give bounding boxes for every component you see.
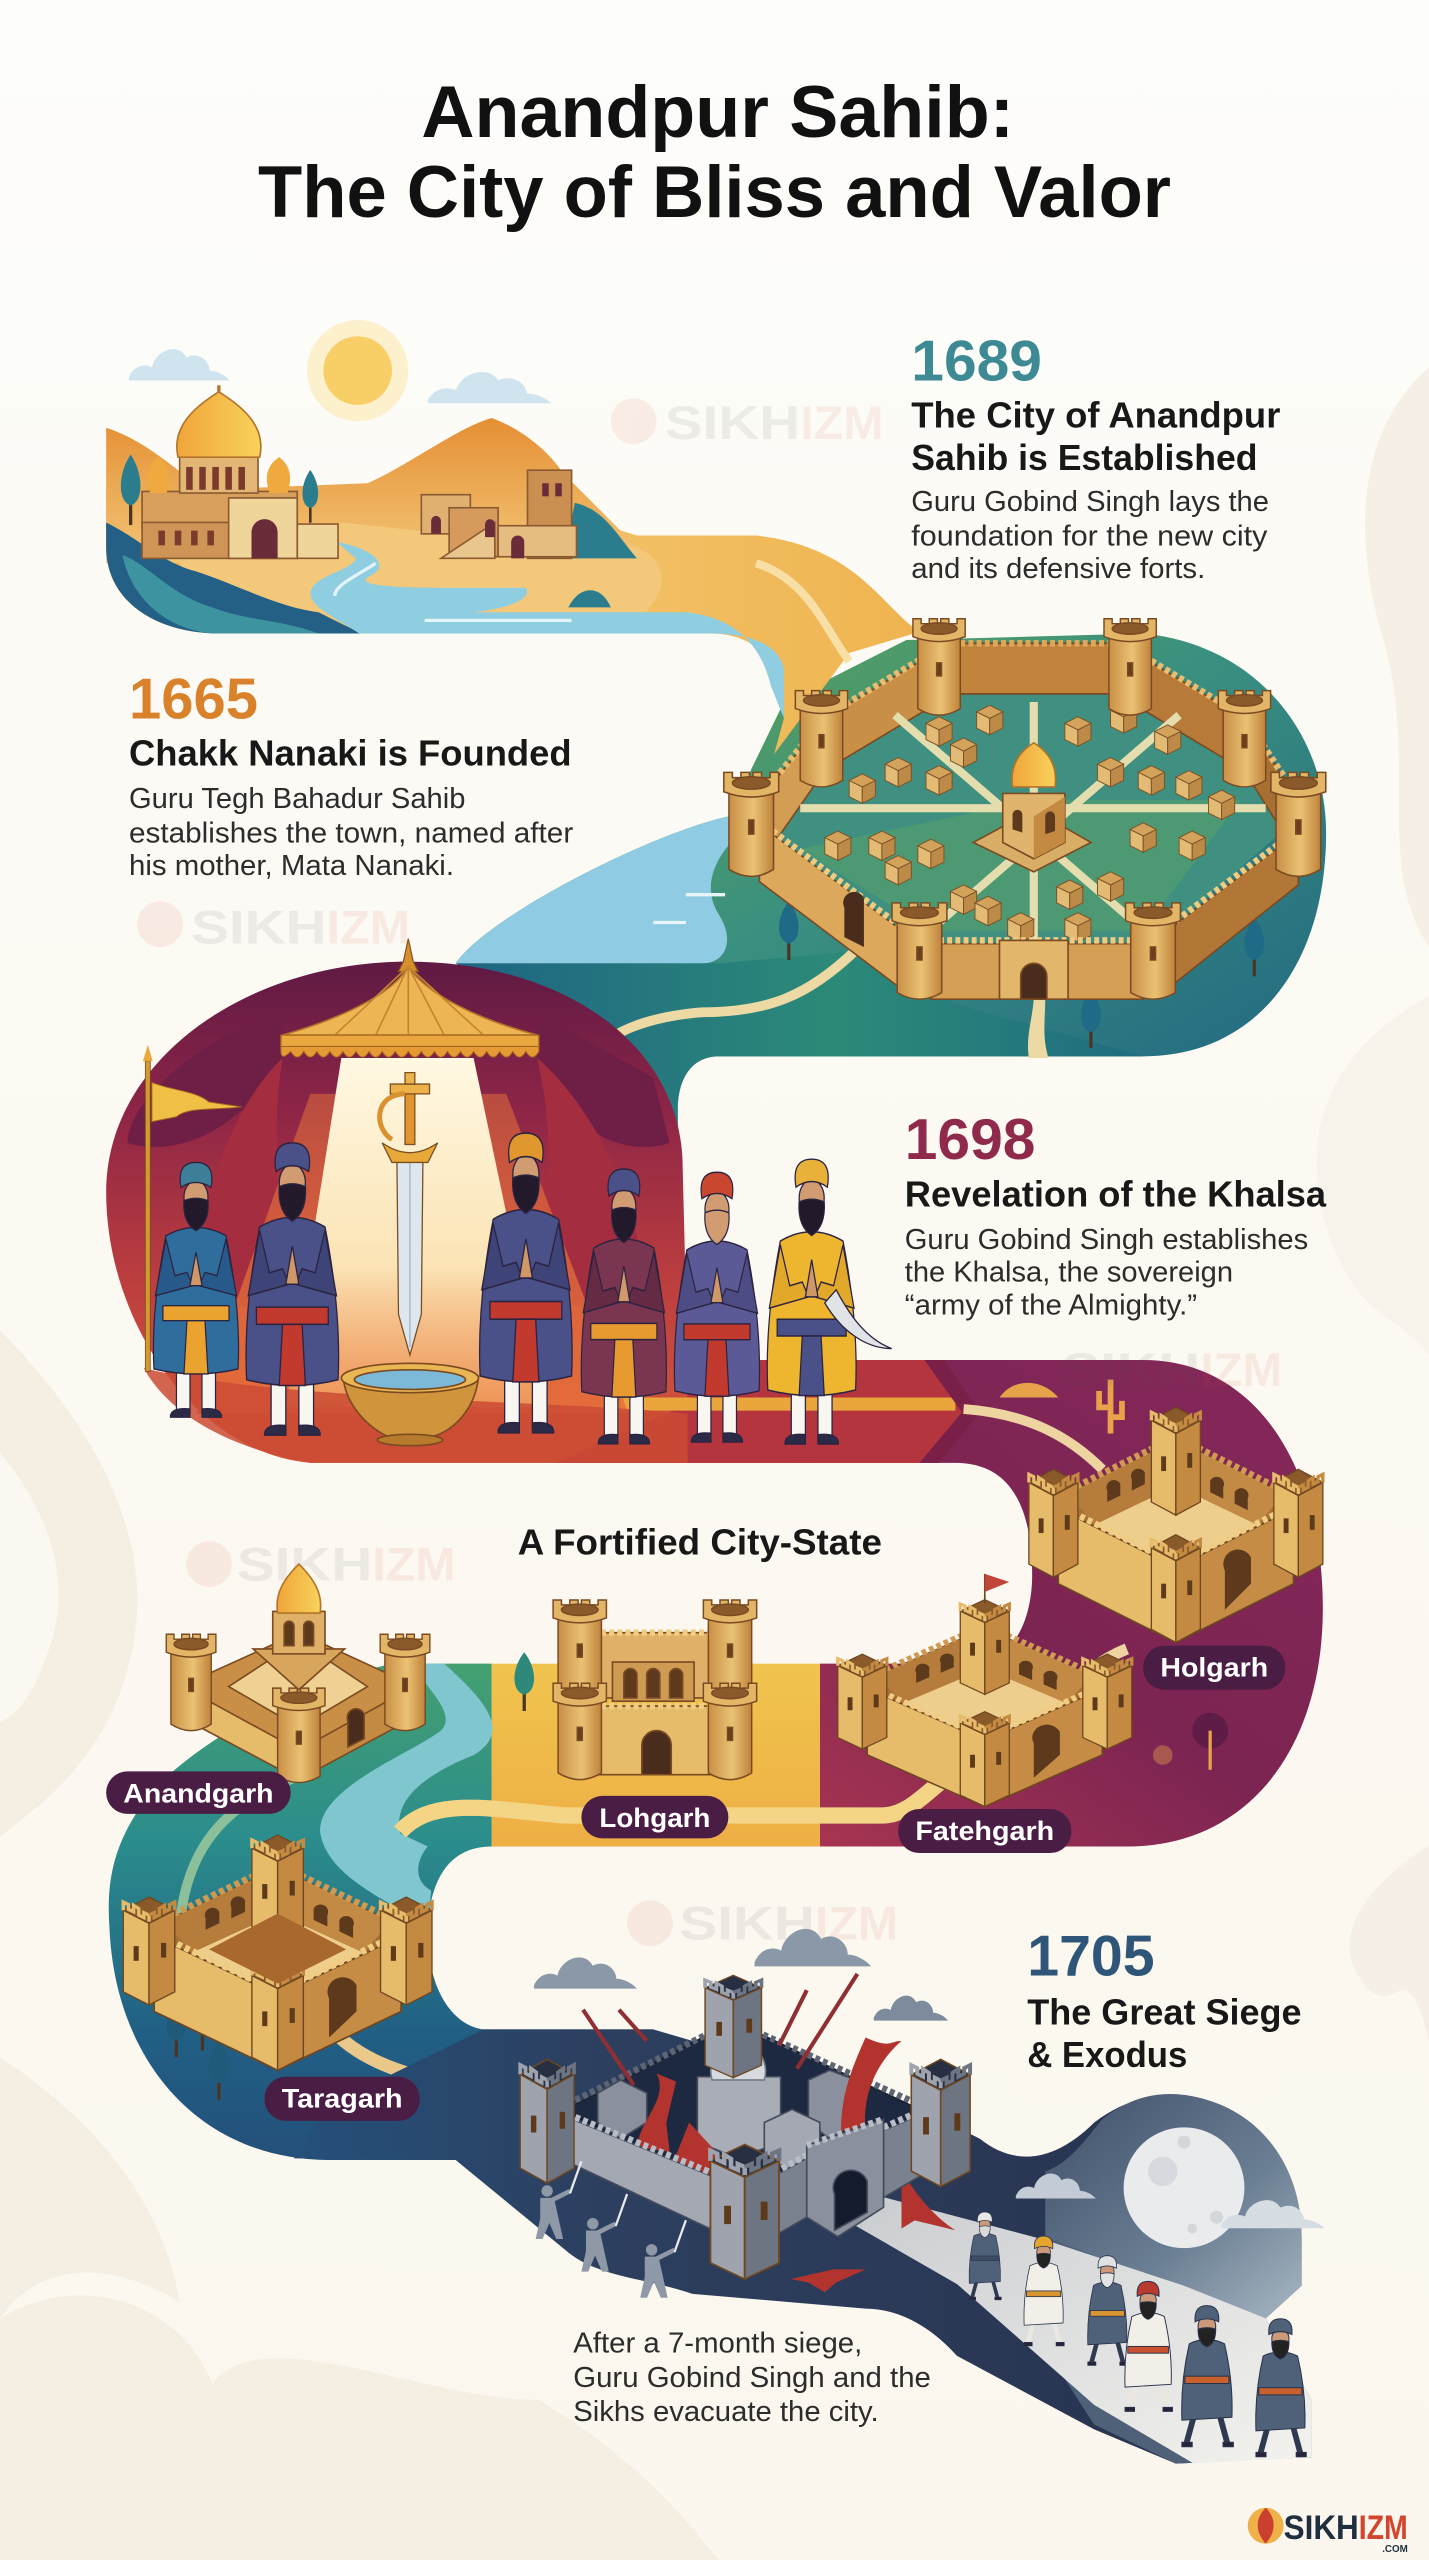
text block: 1689: 1689 [911,329,1042,393]
teal section [109,1664,653,2160]
trees [167,1652,1228,2100]
text block: 1689: and its defensive forts. [911,553,1205,585]
pill label: Lohgarh: Lohgarh [599,1803,710,1833]
text block: 1665: 1665 [129,667,258,731]
panel: Khalsa tent scene [106,939,1323,1847]
watermarks: SIKH [679,1898,815,1951]
mountains [106,418,637,563]
towers [724,619,1326,999]
tent blob [106,962,962,1463]
text block: 1705 description: After a 7-month siege, [573,2328,862,2360]
watermark over ribbon: IZM [1200,1344,1282,1397]
text block: 1705 description: Guru Gobind Singh and the [573,2362,931,2394]
text block: 1665: Chakk Nanaki is Founded [129,733,572,774]
text block: 1689: Sahib is Established [911,437,1258,478]
road [838,2196,1311,2464]
pill label: Fatehgarh [898,1809,1071,1853]
river [310,542,784,718]
title: Anandpur Sahib: [421,70,1014,153]
logo: Sikhizm [1248,2508,1408,2555]
dark ribbon [294,2029,1311,2464]
watermarks: IZM [815,1898,898,1951]
foliage right [563,503,637,558]
fort: Anandgarh [166,1564,430,1783]
watermarks: SIKH [665,397,800,450]
text block: 1705 heading: 1705 [1027,1925,1155,1989]
sword [380,1073,438,1355]
flames and red cloth [637,2073,676,2152]
panel: lower ribbon forts band [109,1407,1323,2160]
pill label: Holgarh: Holgarh [1160,1653,1268,1683]
back walls [939,643,1130,694]
pill label: Taragarh: Taragarh [282,2084,403,2114]
attacking soldiers [536,2161,686,2298]
lower ribbon [964,2237,1311,2464]
text block: 1705 heading: The Great Siege [1027,1991,1302,2032]
pill label: Anandgarh [106,1771,291,1814]
text block: 1698: the Khalsa, the sovereign [905,1257,1233,1289]
roads [800,702,1266,944]
text block: 1705 description [573,2328,931,2428]
floor [144,1368,688,1463]
watermarks: IZM [327,902,410,955]
watermarks: IZM [372,1538,456,1591]
sand ribbon [106,428,919,754]
mosque [697,2077,781,2158]
text block: 1689 [911,329,1280,585]
fort: Lohgarh [553,1600,757,1780]
courtyard [768,694,1290,944]
watermarks: IZM [800,397,884,450]
watermarks [137,397,898,1951]
ruined castle [520,1974,970,2292]
text block: 1665: establishes the town, named after [129,817,574,849]
title: The City of Bliss and Valor [258,150,1171,233]
cream path into forts [964,1409,1102,1469]
towers [520,1975,970,2279]
title [258,70,1171,233]
foliage left [106,522,363,633]
pill label: Lohgarh [581,1796,728,1838]
houses [825,704,1235,942]
logo: Sikhizm: .COM [1382,2544,1408,2555]
evacuating Sikhs [969,2212,1306,2457]
text block: 1698: Guru Gobind Singh establishes [905,1224,1308,1256]
canopy [281,939,539,1057]
pill label: Holgarh [1143,1646,1285,1690]
pill label: Fatehgarh: Fatehgarh [915,1816,1054,1846]
heading: A Fortified City-State: A Fortified City-State [518,1521,882,1562]
orange glow [196,1094,629,1414]
night clouds [534,1929,1324,2228]
logo: Sikhizm: IZM [1359,2509,1408,2547]
five figures and flag bearer [153,1133,892,1444]
outer walls [560,2114,720,2233]
river [320,1664,492,1927]
fort: Fatehgarh [838,1574,1132,1806]
front walls [759,824,906,993]
gate [999,940,1068,999]
panel: landscape 1665 [106,320,919,754]
light beam [286,1058,547,1407]
panel: siege of 1705 [294,1929,1324,2464]
watermark over ribbon: SIKH [1062,1344,1200,1397]
central temple [973,743,1091,872]
courtyard [563,2021,923,2196]
maroon ribbon fort section [653,1360,1323,1847]
watermarks: SIKH [191,902,327,955]
fort: Holgarh [1029,1407,1323,1642]
text block: 1689: Guru Gobind Singh lays the [911,486,1269,518]
water bowl [341,1363,479,1446]
panel: fort ground [456,633,1326,1176]
cream road [611,950,856,1038]
moon backdrop [1045,2094,1302,2318]
text block: 1698 [905,1108,1327,1321]
town houses [421,470,576,558]
moon [1124,2127,1244,2248]
text block: 1698: “army of the Almighty.” [905,1289,1197,1321]
logo: Sikhizm: SIKH [1284,2509,1359,2547]
inner gates [843,892,864,947]
pill label: Anandgarh: Anandgarh [123,1778,274,1808]
watermark over ribbon [1062,1344,1282,1397]
text block: 1705 heading [1027,1925,1302,2075]
flag [143,1045,242,1371]
golden road [400,1776,947,1832]
pill label: Taragarh [265,2077,420,2121]
text block: 1665: his mother, Mata Nanaki. [129,850,454,882]
text block: 1705 heading: & Exodus [1027,2034,1187,2075]
drapes [127,1012,283,1147]
arrows [583,1974,857,2085]
text block: 1665: Guru Tegh Bahadur Sahib [129,783,465,815]
text block: 1705 description: Sikhs evacuate the city. [573,2396,879,2428]
temple [121,385,338,558]
panel: main fort of Anandpur [724,619,1326,999]
river two [456,816,755,963]
Taragarh road [335,2033,514,2093]
text block: 1689: The City of Anandpur [911,395,1280,436]
yellow section [492,1664,820,1847]
sun [307,320,408,421]
gatehouse [807,2119,884,2237]
fort: Taragarh [123,1835,432,2070]
text block: 1689: foundation for the new city [911,520,1268,552]
text block: 1665 [129,667,574,882]
text block: 1698: 1698 [905,1108,1035,1172]
clouds [129,349,551,403]
text block: 1698: Revelation of the Khalsa [905,1174,1327,1215]
watermarks: SIKH [237,1538,372,1591]
